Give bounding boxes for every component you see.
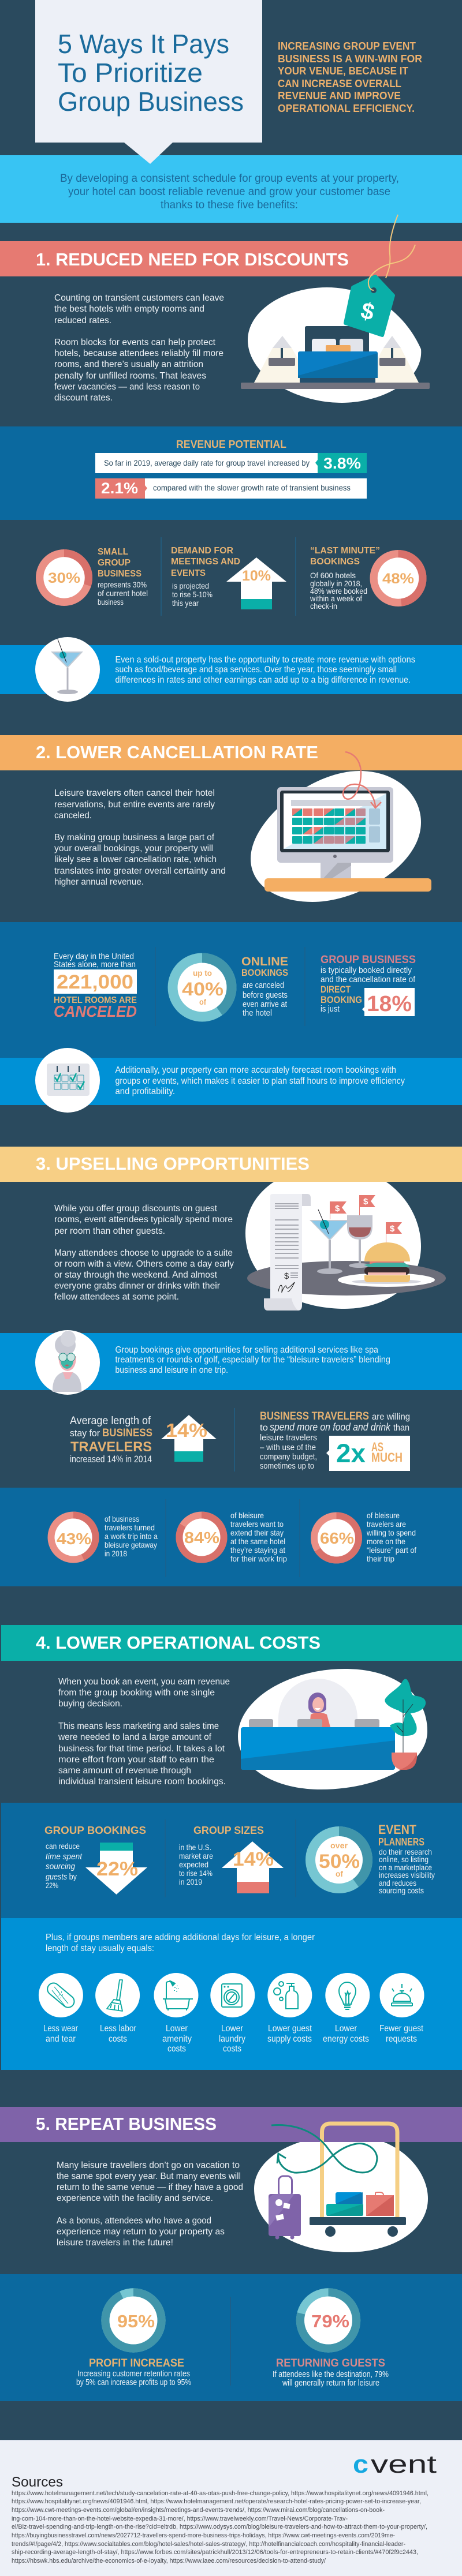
stat: small group business: business xyxy=(98,597,124,606)
sources list: trends/#!/page/4/2, https://www.socialtables.com/blog/hotel-sales/hotel-sales-strategy/, http://hotelfinancialcoach.com/hospitality-financial-leader- xyxy=(12,2541,405,2548)
callout text: Additionally, your property can more accurately forecast room bookings with xyxy=(116,1065,396,1075)
stat bar: 3.8% xyxy=(95,453,367,473)
stat: online bookings 40%: before guests xyxy=(243,990,288,1000)
subtitle text: REVENUE AND IMPROVE xyxy=(278,90,401,102)
stat: small group business: SMALL xyxy=(98,547,128,557)
section 2 body text: canceled. xyxy=(54,811,92,821)
section 2 heading band xyxy=(0,735,462,770)
stat: group sizes 14%: in the U.S. xyxy=(179,1843,211,1852)
benefit: lower laundry costs xyxy=(210,1973,255,2054)
section 3 body text: or stay through the weekend. And almost xyxy=(54,1270,218,1280)
stat: 66%: 66% xyxy=(320,1529,354,1547)
stat: last minute bookings: “LAST MINUTE” xyxy=(310,546,380,556)
stat: 84%: at the same hotel xyxy=(230,1537,285,1546)
sources list xyxy=(12,2490,429,2564)
section 1 body text: the best hotels with empty rooms and xyxy=(54,304,204,314)
benefit: lower amenity costs xyxy=(154,1973,199,2054)
section 2 heading band: 2. LOWER CANCELLATION RATE xyxy=(36,742,318,762)
stat: business travelers spend 2x: spend more on food and drink xyxy=(270,1421,391,1433)
illustration: receipt, drinks and burger xyxy=(247,1194,446,1311)
stat: 221,000 rooms canceled: States alone, more than xyxy=(54,960,136,969)
section 5 body text: As a bonus, attendees who have a good xyxy=(57,2216,211,2226)
stat: demand for meetings and events: MEETINGS AND xyxy=(171,557,240,567)
benefit: lower energy costs xyxy=(323,1973,370,2044)
section 1 body text: rooms, and there’s usually an attrition xyxy=(54,360,203,369)
stat: 43%: 43% xyxy=(57,1530,91,1548)
section 5 heading band: 5. REPEAT BUSINESS xyxy=(36,2114,217,2134)
section 2 body text: By making group business a large part of xyxy=(54,833,215,843)
stat: event planners 50%: sourcing costs xyxy=(379,1886,424,1895)
stat: demand for meetings and events: EVENTS xyxy=(171,568,206,578)
callout text: treatments or rounds of golf, especially for the “bleisure travelers” blending xyxy=(116,1355,390,1365)
stat: returning guests 79%: will generally return for leisure xyxy=(282,2378,379,2388)
stat: small group business: represents 30% xyxy=(98,580,147,589)
sources list: ship-recording-average-length-of-stay/, https://www.forbes.com/sites/patrickhull/2013/12/06/tools-for-entrepreneurs-to-retain-clients/#470f2f9c2443, xyxy=(12,2549,418,2556)
callout: food and beverage revenue xyxy=(0,637,462,702)
stat: online bookings 40%: BOOKINGS xyxy=(241,967,288,978)
luggage cart xyxy=(310,2192,406,2237)
stat: last minute bookings: 48% xyxy=(382,571,414,587)
stat: online bookings 40%: of xyxy=(199,997,206,1006)
section 1 body text: penalty for unfilled rooms. That leaves xyxy=(54,371,206,381)
stat: event planners 50%: PLANNERS xyxy=(378,1836,424,1848)
section 2 body text: likely see a lower cancellation rate, which xyxy=(54,855,217,864)
stat: business travelers spend 2x: BUSINESS TRAVELERS xyxy=(260,1410,369,1422)
stat bar: 3.8%: 3.8% xyxy=(323,455,361,472)
subtitle text: INCREASING GROUP EVENT xyxy=(278,40,416,52)
benefits intro text: Plus, if groups members are adding additional days for leisure, a longer xyxy=(46,1933,315,1942)
stat: small group business: GROUP xyxy=(98,558,131,568)
stat: length of stay: BUSINESS xyxy=(102,1427,152,1439)
benefit: less labor costs: Less labor xyxy=(100,2024,136,2034)
panel: section 5 stats xyxy=(0,2274,462,2401)
benefit: less labor costs: costs xyxy=(109,2034,127,2044)
stat: length of stay: Average length of xyxy=(70,1415,151,1427)
callout text: business and leisure in one trip. xyxy=(116,1365,228,1375)
sources list: https://www.hospitalitynet.org/news/4091946.html, https://www.hotelmanagement.net/operate/research-hotel-rates-pricing-power-set-to-increase-year, xyxy=(12,2498,421,2505)
title card: Group Business xyxy=(58,87,244,117)
stat: last minute bookings: 48% were booked xyxy=(310,586,367,596)
benefit: less wear and tear: and tear xyxy=(46,2034,76,2044)
stat: small group business: of current hotel xyxy=(98,589,148,598)
callout text: Group bookings give opportunities for selling additional services like spa xyxy=(116,1345,378,1355)
benefit: lower guest supply costs: supply costs xyxy=(267,2034,312,2044)
stat: 43% xyxy=(47,1512,158,1563)
stat: 84%: extend their stay xyxy=(230,1528,284,1537)
stat: profit increase 95%: PROFIT INCREASE xyxy=(89,2357,184,2369)
section 1 body text: Counting on transient customers can leave xyxy=(54,293,224,303)
section 3 body text: While you offer group discounts on guest xyxy=(54,1204,218,1214)
section 3 body text: rooms, event attendees typically spend more xyxy=(54,1215,233,1225)
stat: 66% xyxy=(311,1511,416,1564)
stat: length of stay xyxy=(70,1415,217,1465)
section 2 body text: translates into greater overall certainty and xyxy=(54,866,226,876)
stat: online bookings 40%: the hotel xyxy=(243,1008,272,1018)
stat: profit increase 95% xyxy=(76,2288,191,2387)
section 5 body text: return to the same venue — if they have a good xyxy=(57,2182,243,2192)
section 3 body text: fellow attendees at some point. xyxy=(54,1292,179,1302)
panel: bleisure stats xyxy=(0,1488,462,1586)
stat: group bookings 22%: GROUP BOOKINGS xyxy=(44,1825,146,1836)
stat: business travelers spend 2x: are willing xyxy=(372,1412,410,1422)
section 4 heading band: 4. LOWER OPERATIONAL COSTS xyxy=(36,1633,321,1653)
illustration: front desk with attendant xyxy=(238,1669,427,1789)
stat: business travelers spend 2x: to xyxy=(260,1423,268,1433)
section 2 body text: Leisure travelers often cancel their hotel xyxy=(54,788,215,798)
section 5 body text: the same spot every year. But many events will xyxy=(57,2171,241,2181)
stat: demand for meetings and events: to rise 5-10% xyxy=(172,590,213,599)
sources list: https://hbswk.hbs.edu/archive/the-economics-of-e-loyalty, https://www.iaee.com/resources/decision-to-attend-study/ xyxy=(12,2558,326,2564)
stat: group business direct booking 18%: is just xyxy=(321,1004,340,1014)
panel: longer stay benefits xyxy=(1,1918,462,2070)
stat bar: 2.1%: 2.1% xyxy=(101,480,138,497)
stat: 221,000 rooms canceled: CANCELED xyxy=(54,1002,137,1020)
stat: group business direct booking 18%: GROUP BUSINESS xyxy=(321,954,416,966)
section 2 body text xyxy=(54,788,226,887)
receipt xyxy=(264,1194,311,1311)
benefit: lower guest supply costs xyxy=(267,1973,312,2044)
stat: business travelers spend 2x: leisure travelers xyxy=(260,1433,317,1443)
benefit: fewer guest requests: Fewer guest xyxy=(379,2024,424,2034)
icon: down arrow 22%: 22% xyxy=(96,1858,138,1880)
section 1 body text: hotels, because attendees reliably fill more xyxy=(54,349,223,358)
stat: group business direct booking 18%: is typically booked directly xyxy=(321,965,412,975)
section 4 heading band xyxy=(1,1625,462,1661)
benefit: lower laundry costs: Lower xyxy=(221,2024,243,2034)
stat: last minute bookings: within a week of xyxy=(310,594,362,603)
benefit: lower amenity costs: costs xyxy=(167,2044,186,2054)
stat: 43%: bleisure getaway xyxy=(105,1540,157,1549)
subtitle text: BUSINESS IS A WIN-WIN FOR xyxy=(278,53,422,65)
panel: section 4 stats xyxy=(1,1803,462,1918)
stat: demand for meetings and events xyxy=(171,546,286,609)
benefits intro text xyxy=(46,1933,315,1953)
stat: group sizes 14%: in 2019 xyxy=(179,1877,202,1886)
sources list: https://www.cwt-meetings-events.com/global/en/insights/meetings-and-events-trends/, https://www.mirai.com/blog/cancellations-on-book- xyxy=(12,2507,385,2514)
section 3 body text xyxy=(54,1204,234,1302)
panel: revenue potential xyxy=(0,426,462,520)
price flags xyxy=(330,1195,402,1242)
illustration: booking calendar on monitor xyxy=(251,752,431,902)
section 4 body text: same amount of revenue through xyxy=(58,1766,191,1776)
stat: 84% xyxy=(176,1511,287,1563)
stat: business travelers spend 2x: than xyxy=(393,1423,409,1433)
callout text: and profitability. xyxy=(116,1087,175,1096)
benefit: fewer guest requests: requests xyxy=(386,2034,417,2044)
callout text xyxy=(116,1345,390,1375)
stat: last minute bookings: Of 600 hotels xyxy=(310,571,356,580)
stat: group bookings 22%: can reduce xyxy=(46,1841,80,1851)
section 1 heading band: 1. REDUCED NEED FOR DISCOUNTS xyxy=(36,249,349,269)
stat: returning guests 79%: RETURNING GUESTS xyxy=(276,2357,385,2369)
stat: last minute bookings: globally in 2018, xyxy=(310,579,362,588)
intro band: thanks to these five benefits: xyxy=(161,199,298,211)
section 1 body text: fewer vacancies — and less reason to xyxy=(54,382,200,392)
subtitle text: OPERATIONAL EFFICIENCY. xyxy=(278,103,415,114)
sources list: https://www.hotelmanagement.net/tech/study-cancelation-rate-at-40-as-otas-push-free-change-policy, https://www.hospitalitynet.org/news/4091946.html, xyxy=(12,2490,429,2497)
stat: online bookings 40%: even arrive at xyxy=(243,999,288,1009)
price flags: $ xyxy=(390,1224,395,1234)
benefit: lower energy costs: energy costs xyxy=(323,2034,369,2044)
stat: 43%: in 2018 xyxy=(105,1549,127,1558)
section 3 body text: per room than other guests. xyxy=(54,1226,165,1236)
stat: group business direct booking 18%: DIRECT xyxy=(321,984,351,995)
stat: group sizes 14%: to rise 14% xyxy=(179,1869,213,1878)
martini glass xyxy=(310,1210,349,1274)
sources list: https://buyingbusinesstravel.com/news/2027712-travellers-spend-more-business-trips-holidays, https://www.cwt-meetings-events.com/2019me- xyxy=(12,2532,395,2539)
stat: event planners 50%: of xyxy=(336,1869,343,1878)
intro band: By developing a consistent schedule for group events at your property, xyxy=(60,173,399,185)
section 4 body text: business for that time period. It takes a lot xyxy=(58,1744,225,1754)
callout text: such as food/beverage and spa services. Over the year, those seemingly small xyxy=(116,665,397,675)
suitcase xyxy=(269,2176,301,2239)
stat: online bookings 40%: 40% xyxy=(182,979,223,999)
intro band: your hotel can boost reliable revenue and grow your customer base xyxy=(68,186,390,198)
cvent logo: c xyxy=(353,2450,368,2478)
section 3 heading band: 3. UPSELLING OPPORTUNITIES xyxy=(36,1154,310,1174)
stat: 221,000 rooms canceled: Every day in the United xyxy=(54,952,134,961)
icon: martini xyxy=(35,637,100,702)
stat: 84%: they’re staying at xyxy=(230,1545,285,1555)
illustration: bed with price tag xyxy=(241,215,430,403)
stat bar: 2.1%: compared with the slower growth rate of transient business xyxy=(153,483,351,492)
stat: last minute bookings: check-in xyxy=(310,601,337,611)
section 3 body text: everyone grabs dinner or drinks with their xyxy=(54,1281,220,1291)
stat: business travelers spend 2x: company budget, xyxy=(260,1452,317,1462)
stat: group bookings 22%: 22% xyxy=(46,1881,58,1890)
callout text xyxy=(116,655,415,685)
stat: demand for meetings and events: DEMAND FOR xyxy=(171,546,233,556)
sources list: el/Biz-travel-spending-and-trip-length-on-the-rise?cid=eltrdb, https://www.odysys.com/blog/bleisure-travelers-and-how-to-attract-them-to-your-property/, xyxy=(12,2523,427,2530)
stat: demand for meetings and events: is projected xyxy=(172,581,209,590)
callout text: Even a sold-out property has the opportunity to create more revenue with options xyxy=(116,655,415,665)
stat: small group business xyxy=(36,547,148,606)
section 4 body text: When you book an event, you earn revenue xyxy=(58,1677,230,1687)
callout: spa and golf services xyxy=(0,1330,462,1395)
sources heading: Sources xyxy=(12,2474,63,2490)
section 4 body text: individual transient leisure room bookings. xyxy=(58,1777,226,1787)
section 5 body text: experience may return to your property as xyxy=(57,2227,225,2237)
stat: 84%: travelers want to xyxy=(230,1519,284,1529)
title card: To Prioritize xyxy=(58,58,203,88)
stat: group business direct booking 18%: 18% xyxy=(367,992,412,1016)
section 2 body text: reservations, but entire events are rarely xyxy=(54,800,215,810)
subtitle text xyxy=(278,40,422,114)
section 3 body text: Many attendees choose to upgrade to a suite xyxy=(54,1248,233,1258)
benefit: lower laundry costs: costs xyxy=(223,2044,241,2054)
stat: group sizes 14% xyxy=(179,1825,284,1893)
section 4 body text: more effort from your staff to earn the xyxy=(58,1755,214,1765)
icon: up arrow 14%: 14% xyxy=(233,1848,274,1870)
stat: demand for meetings and events: this year xyxy=(172,598,199,608)
sources list: ing-com-104-more-than-on-the-hotel-website-expedia-31-more/, https://www.travelweekly.com/Travel-News/Corporate-Trav- xyxy=(12,2515,348,2522)
burger xyxy=(338,1242,435,1287)
stat: group bookings 22%: time spent xyxy=(46,1852,83,1862)
stat: profit increase 95%: 95% xyxy=(117,2311,155,2331)
stat: returning guests 79% xyxy=(273,2288,389,2388)
stat: 66%: willing to spend xyxy=(366,1528,416,1537)
benefit: lower amenity costs: Lower xyxy=(166,2024,188,2034)
stat: online bookings 40%: are canceled xyxy=(243,980,284,990)
stat: event planners 50%: over xyxy=(330,1841,348,1850)
stat: length of stay: stay for xyxy=(70,1428,100,1439)
illustration blob: upselling xyxy=(245,1166,421,1309)
benefit: lower energy costs: Lower xyxy=(335,2024,357,2034)
stat: 66%: more on the xyxy=(367,1537,405,1546)
icon: woman with face mask xyxy=(35,1330,100,1395)
stat: small group business: 30% xyxy=(48,570,80,586)
stat: profit increase 95%: by 5% can increase profits up to 95% xyxy=(76,2377,191,2387)
illustration: luggage cart and repeat loop xyxy=(269,2124,406,2239)
stat: event planners 50%: increases visibility xyxy=(379,1870,435,1879)
stat: 84%: for their work trip xyxy=(230,1554,287,1563)
section 5 body text: Many leisure travellers don’t go on vacation to xyxy=(57,2161,240,2170)
section 5 body text xyxy=(57,2161,243,2248)
panel: footer xyxy=(0,2440,462,2576)
icon: up arrow 10% xyxy=(226,557,286,609)
stat: last minute bookings xyxy=(310,546,426,611)
potted plant xyxy=(385,1679,426,1770)
stat: length of stay: TRAVELERS xyxy=(70,1439,152,1455)
section 1 heading band xyxy=(0,241,462,276)
stat: event planners 50%: do their research xyxy=(379,1847,432,1856)
panel: section 1 stats xyxy=(36,537,426,616)
icon: calendar checklist xyxy=(35,1048,100,1113)
section 1 body text xyxy=(54,293,224,403)
benefit: less wear and tear: Less wear xyxy=(43,2024,78,2034)
stat: group bookings 22%: sourcing xyxy=(46,1862,76,1871)
illustration blob: repeat business xyxy=(254,2135,428,2252)
stat: 84%: 84% xyxy=(184,1529,219,1547)
benefit: lower guest supply costs: Lower guest xyxy=(268,2024,312,2034)
section 2 body text: your overall bookings, your property will xyxy=(54,844,213,853)
callout text: differences in rates and other earnings can add up to a big difference in revenue. xyxy=(116,675,411,685)
stat: returning guests 79%: If attendees like the destination, 79% xyxy=(273,2369,389,2379)
stat: group sizes 14%: GROUP SIZES xyxy=(193,1825,264,1836)
stat: group bookings 22% xyxy=(44,1825,147,1894)
stat: 43%: of business xyxy=(105,1514,139,1523)
stat: 221,000 rooms canceled: HOTEL ROOMS ARE xyxy=(54,995,137,1005)
stat: event planners 50%: EVENT xyxy=(378,1822,416,1837)
wine glass xyxy=(347,1215,372,1268)
icon: up arrow 14%: 14% xyxy=(166,1420,207,1441)
price flags: $ xyxy=(363,1197,368,1207)
stat: 221,000 rooms canceled xyxy=(54,952,137,1020)
stat: 66%: “leisure” part of xyxy=(367,1545,416,1555)
stat: 66%: their trip xyxy=(367,1554,394,1563)
stat: group bookings 22%: guests by xyxy=(46,1872,77,1882)
benefits intro text: length of stay usually equals: xyxy=(46,1944,154,1953)
stat: 43%: travelers turned xyxy=(105,1523,155,1532)
stat: 84%: of bleisure xyxy=(230,1511,264,1520)
stat: event planners 50% xyxy=(305,1822,435,1895)
title card xyxy=(35,0,262,164)
stat: business travelers spend 2x: – with use of the xyxy=(260,1443,316,1452)
cvent logo xyxy=(353,2450,437,2478)
price flags: $ xyxy=(335,1204,340,1214)
section 4 body text: This means less marketing and sales time xyxy=(58,1721,219,1731)
subtitle text: CAN INCREASE OVERALL xyxy=(278,78,401,89)
stat: length of stay: increased 14% in 2014 xyxy=(70,1454,152,1465)
section 4 body text: from the group booking with one single xyxy=(58,1688,215,1698)
revenue heading: REVENUE POTENTIAL xyxy=(176,439,286,450)
stat: business travelers spend 2x: AS xyxy=(371,1440,383,1454)
stat: business travelers spend 2x: sometimes up to xyxy=(260,1461,314,1471)
illustration: bed with price tag: $ xyxy=(358,298,377,325)
section 5 body text: experience with the facility and service. xyxy=(57,2193,213,2203)
stat: event planners 50%: on a marketplace xyxy=(379,1863,432,1872)
stat: group business direct booking 18% xyxy=(321,954,416,1016)
benefit: fewer guest requests xyxy=(379,1973,424,2044)
icon: down arrow 22% xyxy=(85,1843,147,1894)
panel: header xyxy=(0,0,462,223)
section 4 body text: buying decision. xyxy=(58,1699,122,1709)
icon: up arrow 14% xyxy=(161,1415,217,1462)
stat: 66%: of bleisure xyxy=(367,1511,400,1520)
cvent logo: vent xyxy=(371,2450,437,2478)
subtitle text: YOUR VENUE, BECAUSE IT xyxy=(278,65,408,77)
callout text: groups or events, which makes it easier to plan staff hours to improve efficiency xyxy=(116,1076,405,1086)
section 1 body text: discount rates. xyxy=(54,393,113,403)
stat: group business direct booking 18%: and the cancellation rate of xyxy=(321,975,416,984)
callout text xyxy=(116,1065,405,1096)
benefit: lower laundry costs: laundry xyxy=(219,2034,245,2044)
icon: up arrow 14% xyxy=(222,1841,284,1893)
stat: group business direct booking 18%: BOOKING xyxy=(321,994,362,1005)
intro band xyxy=(0,155,462,223)
stat: 43%: a work trip into a xyxy=(105,1532,158,1541)
stat: business travelers spend 2x xyxy=(260,1410,410,1471)
benefit: less labor costs xyxy=(95,1973,140,2044)
panel: section 2 stats xyxy=(0,922,462,1058)
stat: 221,000 rooms canceled: 221,000 xyxy=(57,971,133,993)
receipt: $ xyxy=(284,1271,289,1281)
stat: event planners 50%: and reduces xyxy=(379,1878,416,1888)
stat: event planners 50%: online, so listing xyxy=(379,1855,429,1864)
callout: staff forecasting xyxy=(0,1048,462,1113)
stat: business travelers spend 2x: 2x xyxy=(336,1439,366,1468)
stat: online bookings 40% xyxy=(167,953,288,1021)
stat: online bookings 40%: up to xyxy=(193,968,212,978)
section 5 heading band xyxy=(0,2107,462,2142)
stat: 66%: travelers are xyxy=(367,1519,406,1529)
stat: group sizes 14%: market are xyxy=(179,1851,213,1860)
section 3 body text: or room with a view. Others come a day early xyxy=(54,1259,234,1269)
section 1 body text: reduced rates. xyxy=(54,316,111,325)
benefit: less wear and tear xyxy=(39,1973,83,2044)
section 4 body text: were needed to land a large amount of xyxy=(58,1732,212,1742)
stat: profit increase 95%: Increasing customer retention rates xyxy=(77,2369,190,2379)
stat: online bookings 40%: ONLINE xyxy=(241,955,288,968)
benefit: lower amenity costs: amenity xyxy=(162,2034,192,2044)
stat: group sizes 14%: expected xyxy=(179,1860,208,1869)
stat: returning guests 79%: 79% xyxy=(311,2311,349,2331)
stat bar: 2.1% xyxy=(95,478,367,499)
section 2 body text: higher annual revenue. xyxy=(54,877,144,887)
section 3 heading band xyxy=(0,1147,462,1182)
section 1 body text: Room blocks for events can help protect xyxy=(54,338,216,347)
section 5 body text: leisure travelers in the future! xyxy=(57,2238,173,2248)
section 4 body text xyxy=(58,1677,230,1787)
title card: 5 Ways It Pays xyxy=(58,29,229,59)
icon: up arrow 10%: 10% xyxy=(242,568,271,584)
stat: small group business: BUSINESS xyxy=(98,569,141,579)
stat: last minute bookings: BOOKINGS xyxy=(310,557,360,567)
stat: business travelers spend 2x: MUCH xyxy=(371,1450,403,1465)
stat: event planners 50%: 50% xyxy=(319,1851,360,1873)
stat bar: 3.8%: So far in 2019, average daily rate for group travel increased by xyxy=(104,458,310,467)
